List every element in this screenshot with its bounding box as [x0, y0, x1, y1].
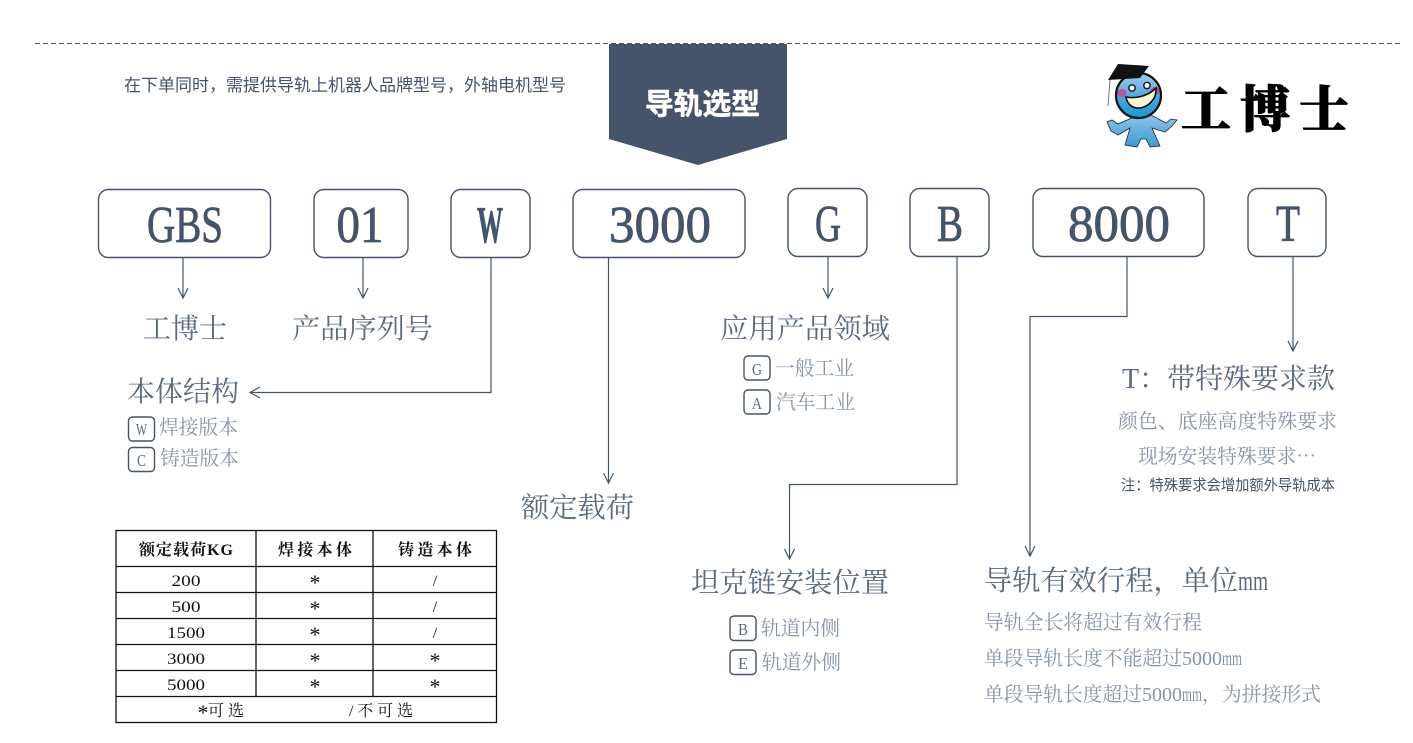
panel: T 特殊要求: [1118, 363, 1337, 494]
table: load options: 200: [172, 573, 200, 590]
table: load options: /: [433, 573, 438, 590]
panel: T 特殊要求: T：带特殊要求款: [1122, 363, 1335, 395]
panel: 导轨有效行程: 单段导轨长度超过: [984, 683, 1142, 706]
code box: GBS: [98, 190, 270, 258]
table: load options: /: [433, 599, 438, 616]
table: load options: 额定载荷KG: [138, 540, 234, 559]
panel: 应用产品领域: 一般工业: [775, 357, 854, 380]
panel: 导轨有效行程: [984, 565, 1321, 706]
label: 额定载荷: 额定载荷: [521, 492, 634, 524]
code box: 3000: [573, 190, 745, 258]
table: load options: *: [310, 622, 320, 647]
table: load options: 5000: [167, 677, 205, 694]
note: order information: 在下单同时，需提供导轨上机器人品牌型号，外轴电机型号: [124, 76, 566, 95]
tag: B: B: [738, 620, 748, 639]
code box: 01: 01: [336, 197, 384, 254]
panel: T 特殊要求: 颜色、底座高度特殊要求: [1118, 410, 1337, 433]
arrow: B to 坦克链安装位置: [784, 257, 957, 559]
table: load options: 500: [172, 599, 200, 616]
panel: 本体结构: 本体结构: [127, 376, 239, 408]
table: load options: 可选: [208, 702, 244, 720]
table: load options: /: [433, 625, 438, 642]
arrow: 01 to 产品序列号: [358, 258, 368, 298]
table: load options: 1500: [167, 625, 205, 642]
code box: 01: [314, 190, 408, 258]
tag: E: [730, 650, 756, 674]
panel: 坦克链安装位置: 轨道内侧: [761, 617, 840, 640]
panel: 本体结构: 焊接版本: [159, 416, 238, 439]
table: load options: 焊接本体: [277, 540, 352, 559]
table: load options: *: [198, 700, 208, 725]
logo: 工博士: 工博士: [1181, 70, 1349, 142]
tag: E: E: [738, 654, 748, 673]
arrow: GBS to 工博士: [178, 258, 188, 298]
code box: W: W: [477, 197, 503, 254]
panel: 坦克链安装位置: [691, 567, 889, 674]
tag: W: W: [136, 420, 148, 439]
panel: 应用产品领域: [720, 313, 890, 414]
table: load options: 3000: [167, 651, 205, 668]
code box: G: [788, 188, 867, 256]
panel: 坦克链安装位置: 轨道外侧: [762, 651, 841, 674]
arrow: 3000 to 额定载荷: [604, 258, 614, 483]
table: load options: *: [310, 648, 320, 673]
panel: T 特殊要求: 现场安装特殊要求⋯: [1138, 440, 1316, 469]
panel: 本体结构: [127, 376, 239, 472]
table: load options: 铸造本体: [398, 540, 472, 559]
panel: 坦克链安装位置: 坦克链安装位置: [691, 567, 889, 599]
table: load options: *: [430, 648, 440, 673]
tag: B: [730, 616, 756, 640]
panel: 导轨有效行程: mm: [1238, 566, 1268, 597]
table: load options: *: [310, 570, 320, 595]
code box: B: B: [937, 196, 963, 253]
panel: 导轨有效行程: mm: [1182, 684, 1202, 706]
tag: C: C: [137, 451, 146, 470]
panel: 应用产品领域: 应用产品领域: [720, 313, 890, 345]
tag: G: [744, 356, 770, 380]
panel: 应用产品领域: 汽车工业: [776, 391, 855, 414]
panel: 本体结构: 铸造版本: [160, 447, 239, 470]
icon: mascot: [1107, 64, 1177, 147]
panel: 导轨有效行程: 导轨有效行程，单位: [984, 565, 1238, 597]
title banner: [609, 44, 787, 165]
code box: T: [1248, 188, 1326, 256]
arrow: G to 应用产品领域: [823, 257, 833, 298]
panel: T 特殊要求: 注：特殊要求会增加额外导轨成本: [1121, 477, 1335, 494]
code box: 8000: 8000: [1068, 196, 1170, 253]
tag: G: G: [752, 360, 762, 379]
logo: 工博士: [1107, 64, 1349, 147]
tag: A: [744, 390, 770, 414]
code box: 3000: 3000: [609, 197, 711, 254]
code box: G: G: [815, 196, 841, 253]
table: load options: *: [310, 596, 320, 621]
code box: 8000: [1033, 188, 1204, 256]
arrow: 8000 to 导轨有效行程: [1025, 257, 1127, 556]
table: load options: *: [310, 674, 320, 699]
panel: 导轨有效行程: ，为拼接形式: [1202, 683, 1321, 706]
code box: B: [910, 188, 989, 256]
panel: 导轨有效行程: 5000: [1142, 684, 1182, 706]
code box: GBS: GBS: [147, 197, 223, 254]
panel: 导轨有效行程: 单段导轨长度不能超过: [984, 647, 1182, 670]
arrow: W to 本体结构: [250, 258, 491, 398]
table: load options: *: [430, 674, 440, 699]
panel: 导轨有效行程: 5000: [1182, 648, 1222, 670]
panel: 导轨有效行程: 导轨全长将超过有效行程: [984, 611, 1202, 634]
label: 产品序列号: 产品序列号: [292, 313, 433, 345]
panel: 导轨有效行程: mm: [1222, 648, 1242, 670]
arrow: T to 特殊要求款: [1288, 257, 1298, 351]
table: load options: [116, 530, 497, 725]
tag: A: A: [752, 394, 763, 413]
code box: W: [451, 190, 530, 258]
code box: T: T: [1276, 196, 1300, 253]
label: 工博士: 工博士: [143, 313, 227, 345]
title banner: 导轨选型: [645, 88, 760, 121]
table: load options: /不可选: [349, 702, 413, 720]
